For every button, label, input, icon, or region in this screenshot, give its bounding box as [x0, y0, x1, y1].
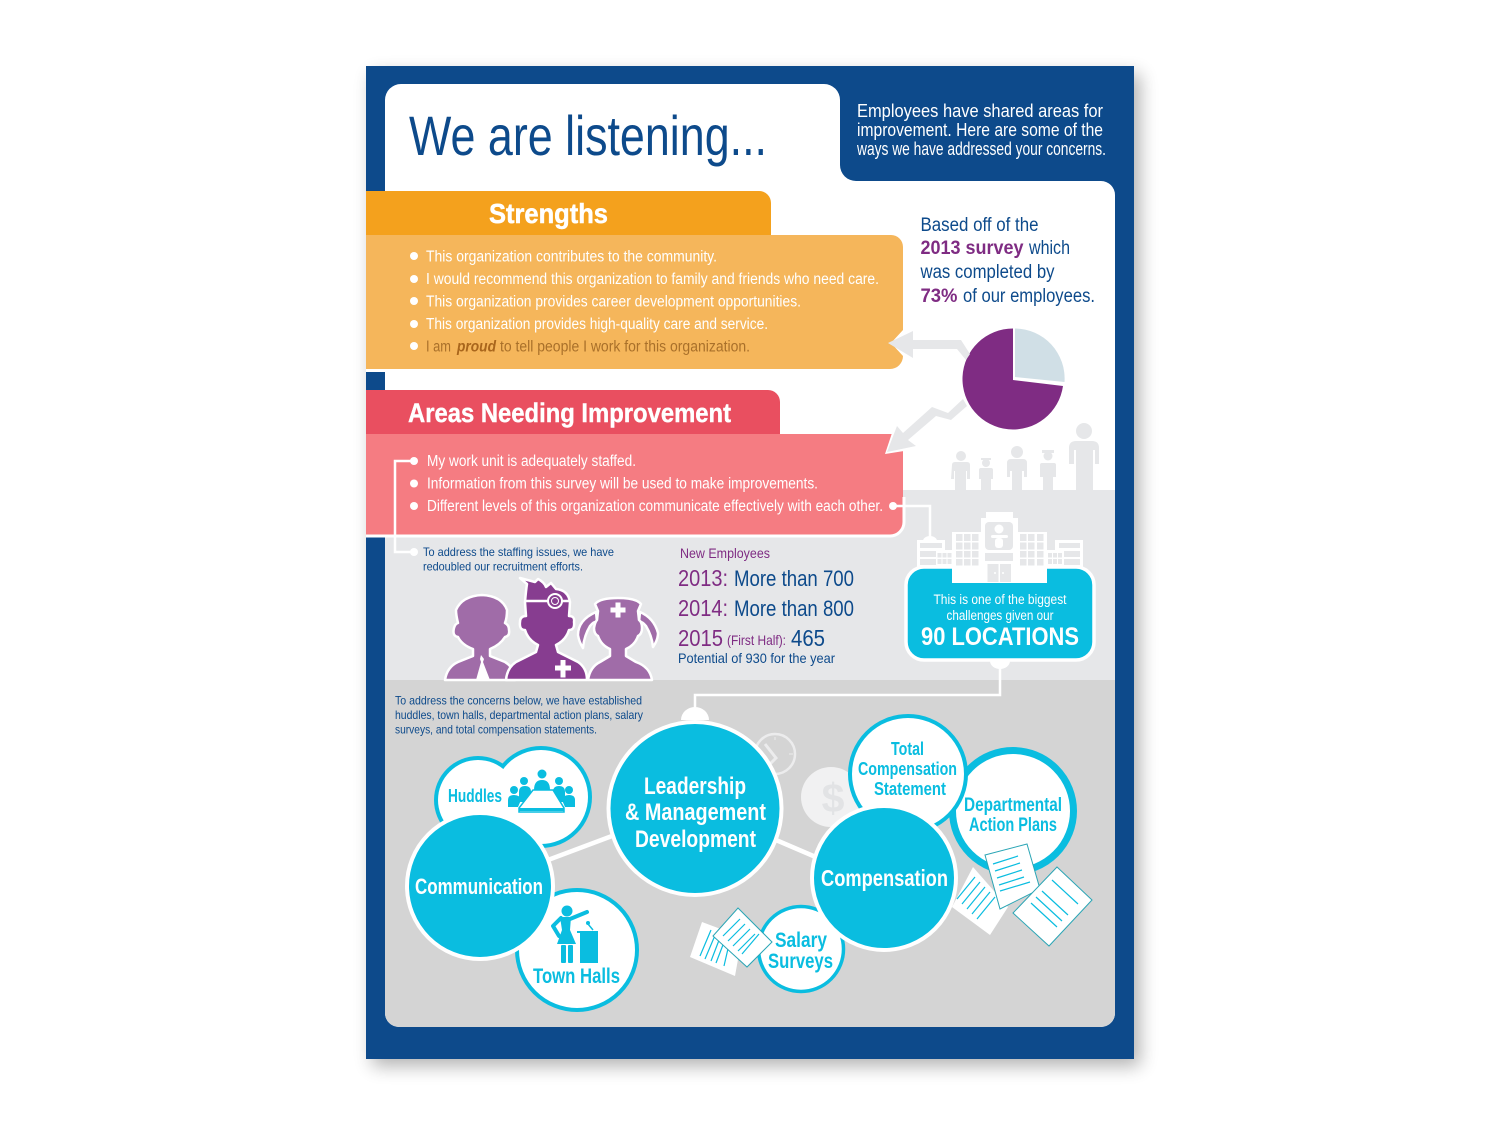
- bubble: departmental action plans: Action Plans: [969, 815, 1057, 836]
- intro text: Employees have shared areas for: [857, 101, 1103, 121]
- icon: meeting table: [508, 770, 575, 812]
- heading: strengths: Strengths: [489, 198, 608, 229]
- bubble: leadership and management development: Leadership: [644, 773, 746, 800]
- survey text: which: [1028, 238, 1070, 259]
- new employees stats: (First Half):: [727, 632, 786, 648]
- arrow: to improvement: [887, 399, 967, 452]
- bubble: total compensation statement: Compensation: [858, 759, 957, 779]
- survey text: was completed by: [920, 262, 1055, 283]
- bubble: huddles: Huddles: [448, 786, 502, 806]
- strengths list: This organization provides high-quality care and service.: [426, 316, 768, 333]
- icon: dollar coin: $: [822, 775, 845, 821]
- poster navy background: [366, 66, 1134, 1059]
- bubble: salary surveys: Salary: [775, 929, 827, 952]
- connector: staffing: [395, 461, 418, 556]
- strengths list: [410, 248, 879, 356]
- concerns text: huddles, town halls, departmental action plans, salary: [395, 708, 643, 722]
- bubble: salary surveys: [758, 906, 844, 992]
- new employees stats: 2014:: [678, 595, 728, 621]
- survey text: 2013 survey: [920, 238, 1024, 259]
- icon: nurse: [578, 598, 658, 680]
- survey text: [920, 215, 1095, 307]
- icon: hospital: [917, 512, 1083, 583]
- strengths list: to tell people I work for this organization.: [500, 338, 750, 356]
- strengths list: This organization provides career development opportunities.: [426, 294, 801, 310]
- bubble: compensation: [812, 806, 956, 950]
- intro text: ways we have addressed your concerns.: [856, 139, 1106, 159]
- strengths list: proud: [456, 338, 496, 356]
- survey text: 73%: [920, 286, 958, 307]
- bubble: salary surveys: Surveys: [768, 950, 833, 973]
- icon: clock: [755, 734, 795, 774]
- new employees stats: New Employees: [680, 545, 770, 561]
- icon: medical staff: [445, 578, 658, 680]
- connecting lines between circles: [548, 836, 818, 860]
- survey text: of our employees.: [963, 286, 1095, 307]
- arrow: to strengths: [888, 331, 970, 360]
- new employees stats: Potential of 930 for the year: [678, 650, 835, 666]
- survey text: Based off of the: [920, 215, 1038, 236]
- staffing text: To address the staffing issues, we have: [423, 545, 614, 559]
- pie chart: 73%: [962, 328, 1065, 430]
- bubble: leadership and management development: & Management: [625, 799, 766, 826]
- strengths list: I am: [426, 338, 451, 356]
- intro text: improvement. Here are some of the: [857, 120, 1103, 140]
- callout: 90 locations: 90 LOCATIONS: [921, 623, 1079, 651]
- strengths list: This organization contributes to the community.: [426, 248, 717, 266]
- concerns text: surveys, and total compensation statements.: [395, 722, 597, 736]
- bubble: leadership and management development: Development: [635, 826, 756, 853]
- bubble: compensation: Compensation: [821, 865, 948, 891]
- bubble: huddles: [434, 746, 592, 848]
- improvement list: Different levels of this organization communicate effectively with each other.: [427, 498, 883, 515]
- white content area: [385, 84, 1115, 1027]
- icon: administrator: [445, 595, 515, 680]
- panel: strengths: [366, 191, 903, 372]
- improvement list: My work unit is adequately staffed.: [427, 453, 636, 470]
- new employees stats: 2015: [678, 625, 723, 651]
- panel: areas needing improvement: [366, 390, 904, 536]
- heading: areas needing improvement: Areas Needing Improvement: [408, 398, 731, 428]
- connector: locations: [889, 502, 937, 541]
- new employees stats: More than 700: [734, 566, 854, 591]
- icon: speaker at podium: [553, 906, 598, 963]
- improvement list: [410, 453, 883, 515]
- concerns text: [395, 694, 643, 736]
- intro text: [856, 101, 1106, 159]
- icon: dollar coin: [801, 767, 861, 827]
- icon: doctor: [506, 578, 587, 680]
- bubble: communication: Communication: [415, 874, 543, 899]
- new employees stats: 465: [791, 625, 825, 651]
- title: We are listening...: [409, 104, 767, 167]
- callout: 90 locations: challenges given our: [946, 608, 1054, 623]
- new employees stats: 2013:: [678, 565, 728, 591]
- icon: documents left: [690, 908, 772, 976]
- light grey band: [385, 490, 1115, 680]
- bubble: departmental action plans: [952, 750, 1074, 872]
- staffing text: [423, 545, 614, 574]
- icon: staff silhouettes: [951, 423, 1099, 490]
- strengths list: I would recommend this organization to family and friends who need care.: [426, 271, 879, 288]
- concerns text: To address the concerns below, we have established: [395, 694, 642, 708]
- poster shadow: [372, 74, 1140, 1066]
- bubble: total compensation statement: Statement: [874, 779, 946, 799]
- callout: 90 locations: [906, 567, 1094, 660]
- bubble: total compensation statement: [850, 716, 966, 832]
- new employees stats: [678, 545, 854, 666]
- bubble: communication: [407, 813, 553, 959]
- bubble: total compensation statement: Total: [891, 739, 924, 759]
- bubble: town halls: [517, 890, 637, 1010]
- callout: 90 locations: This is one of the biggest: [934, 592, 1067, 607]
- darker grey band: [385, 680, 1115, 1027]
- staffing text: redoubled our recruitment efforts.: [423, 560, 583, 574]
- improvement list: Information from this survey will be used to make improvements.: [427, 476, 818, 492]
- bubble: departmental action plans: Departmental: [964, 795, 1062, 816]
- bubble: town halls: Town Halls: [533, 965, 620, 988]
- icon: documents right: [952, 844, 1092, 946]
- connector: locations to leadership: [681, 660, 1010, 720]
- new employees stats: More than 800: [734, 596, 854, 621]
- bubble: leadership and management development: [608, 722, 782, 895]
